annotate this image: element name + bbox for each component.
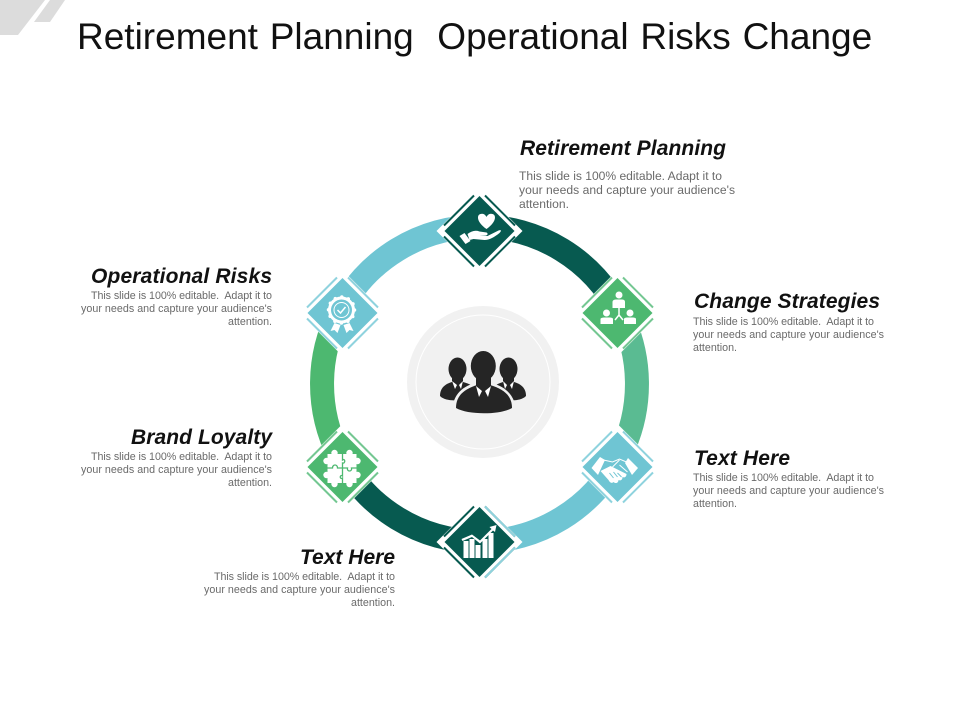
diamond: change strategies: [574, 270, 660, 356]
text block: operational risks: This slide is 100% editable. Adapt it to: [91, 290, 272, 302]
text block: operational risks: your needs and capture your audience's: [81, 303, 272, 315]
text block: retirement planning: attention.: [519, 197, 569, 211]
text block: brand loyalty: Brand Loyalty: [131, 426, 273, 449]
corner decoration: [0, 0, 65, 35]
ring segment: upper left: [339, 226, 480, 312]
diamond: hand and heart: [436, 188, 522, 274]
center circle with people icon: [407, 306, 559, 458]
text block: brand loyalty: This slide is 100% editable. Adapt it to: [91, 451, 272, 463]
icon: puzzle pieces: [323, 450, 361, 487]
text block: brand loyalty: attention.: [228, 477, 272, 489]
text block: change strategies: attention.: [693, 342, 737, 354]
ring segment: lower right: [480, 456, 620, 542]
text block: retirement planning: This slide is 100% editable. Adapt it to: [519, 169, 722, 183]
icon: center person: [452, 351, 516, 413]
text block: text here right: [693, 447, 884, 510]
text block: operational risks: Operational Risks: [91, 265, 272, 288]
diamond: medal: [300, 270, 386, 356]
circular ring: [322, 226, 637, 542]
text block: change strategies: your needs and capture your audience's: [693, 329, 884, 341]
text block: brand loyalty: [81, 426, 273, 489]
icon: left person: [440, 358, 476, 400]
text block: text here bottom: attention.: [351, 597, 395, 609]
text block: text here right: attention.: [693, 498, 737, 510]
text block: text here bottom: Text Here: [300, 546, 395, 569]
diamond: chart: [436, 499, 522, 585]
text block: text here right: Text Here: [694, 447, 790, 470]
text block: text here bottom: your needs and capture your audience's: [204, 584, 395, 596]
icon: three linked people: [600, 292, 636, 324]
ring segment: left: [322, 312, 339, 456]
diamond: puzzle: [300, 424, 386, 510]
ring segment: right: [620, 312, 637, 456]
text block: operational risks: [81, 265, 272, 328]
text block: text here right: your needs and capture your audience's: [693, 485, 884, 497]
text block: text here right: This slide is 100% editable. Adapt it to: [693, 472, 874, 484]
text block: operational risks: attention.: [228, 316, 272, 328]
text block: retirement planning: [519, 137, 735, 211]
text block: change strategies: Change Strategies: [694, 290, 880, 313]
text block: change strategies: [693, 290, 884, 354]
text block: brand loyalty: your needs and capture your audience's: [81, 464, 272, 476]
diamond: handshake: [574, 424, 660, 510]
text block: retirement planning: your needs and capture your audience's: [519, 183, 735, 197]
text block: text here bottom: [204, 546, 395, 609]
text block: change strategies: This slide is 100% editable. Adapt it to: [693, 316, 874, 328]
ring segment: upper right: [480, 226, 620, 312]
icon: hand holding heart: [460, 214, 501, 244]
icon: award rosette: [328, 297, 354, 333]
icon: right person: [491, 358, 526, 400]
icon: growth chart: [462, 525, 496, 558]
text block: text here bottom: This slide is 100% editable. Adapt it to: [214, 571, 395, 583]
text block: retirement planning: Retirement Planning: [520, 137, 726, 160]
ring segment: lower left: [339, 456, 480, 542]
title: Retirement Planning Operational Risks Change: [77, 16, 872, 57]
icon: handshake: [592, 457, 638, 483]
